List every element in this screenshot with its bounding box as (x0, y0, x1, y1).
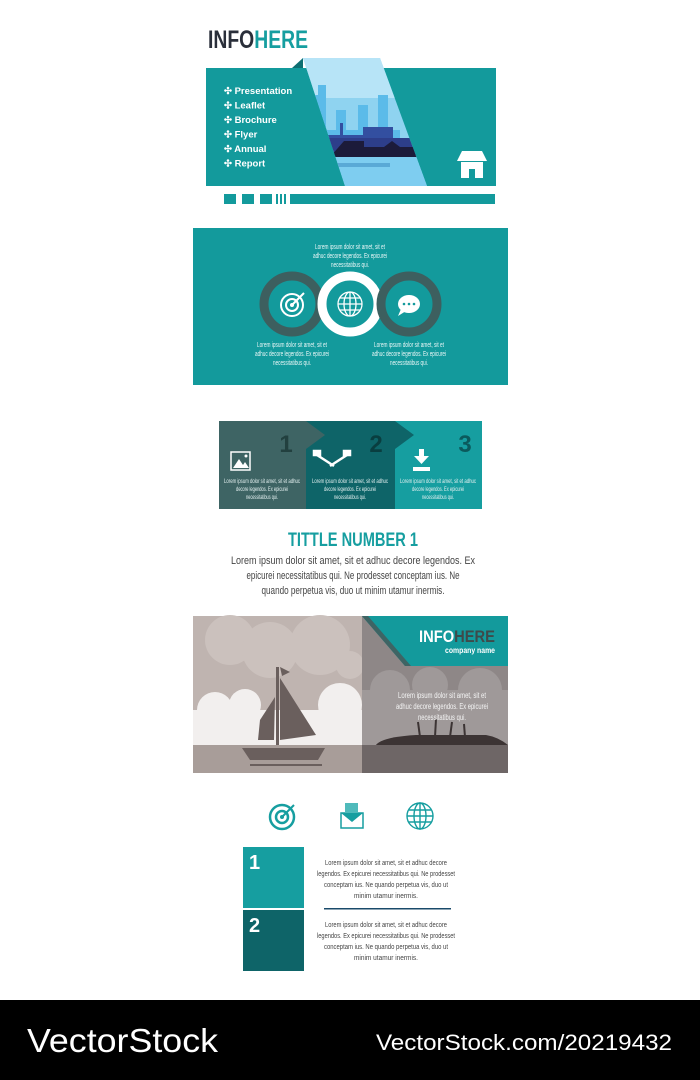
text: right: Lorem ipsum dolor sit amet, sit et (374, 342, 444, 349)
list: presentation items: ✣ Presentation (224, 86, 292, 97)
city image (300, 58, 430, 188)
item 2: legendos. Ex epicurei necessitatibus qui. Ne prodesset (317, 933, 455, 940)
step texts: decore legendos. Ex epicurei (324, 487, 376, 493)
panel: circles (193, 228, 508, 385)
text: right: necessitatibus qui. (390, 360, 428, 367)
step texts: necessitatibus qui. (246, 495, 278, 501)
item 1: legendos. Ex epicurei necessitatibus qui. Ne prodesset (317, 871, 455, 878)
text block: body: epicurei necessitatibus qui. Ne prodesset conceptam ius. Ne (246, 570, 460, 582)
step texts: necessitatibus qui. (334, 495, 366, 501)
text: top: Lorem ipsum dolor sit amet, sit et (315, 244, 385, 251)
heading: TITTLE NUMBER 1: TITTLE NUMBER 1 (288, 530, 418, 551)
step numbers: 1 (279, 431, 293, 458)
text: right: adhuc decore legendos. Ex epicurei (372, 351, 446, 358)
step texts: Lorem ipsum dolor sit amet, sit et adhuc (400, 479, 476, 485)
step numbers (279, 431, 472, 458)
item 1: minim utamur inermis. (354, 893, 418, 900)
text: left: Lorem ipsum dolor sit amet, sit et (257, 342, 327, 349)
icon row (270, 803, 433, 829)
circle: chat (381, 276, 437, 332)
text: top (313, 244, 387, 269)
progress bar (224, 194, 495, 204)
icon: handshake (314, 451, 350, 466)
step texts (224, 479, 476, 501)
item 1: 1 (249, 852, 260, 874)
photo text (396, 691, 488, 722)
text block: body: quando perpetua vis, duo ut minim utamur inermis. (262, 585, 444, 597)
item 2: Lorem ipsum dolor sit amet, sit et adhuc decore (325, 922, 447, 929)
icon: home (457, 151, 487, 178)
footer: VectorStock (27, 1022, 219, 1059)
item 1: Lorem ipsum dolor sit amet, sit et adhuc decore (325, 860, 447, 867)
photo text: necessitatibus qui. (418, 713, 466, 722)
text: left: necessitatibus qui. (273, 360, 311, 367)
panel: photo (193, 615, 508, 773)
step numbers: 2 (369, 431, 383, 458)
title: INFOHERE: INFOHERE (208, 26, 308, 54)
teal corner banner (362, 616, 508, 666)
list: presentation items: ✣ Brochure (224, 115, 277, 126)
text block: body (231, 555, 475, 597)
step texts: Lorem ipsum dolor sit amet, sit et adhuc (224, 479, 300, 485)
item 1: conceptam ius. Ne quando perpetua vis, duo ut (324, 882, 448, 889)
step texts: decore legendos. Ex epicurei (412, 487, 464, 493)
text: right (372, 342, 446, 367)
list: presentation items: ✣ Report (224, 158, 266, 170)
footer (0, 1000, 700, 1080)
step numbers: 3 (458, 431, 472, 458)
item 1 (243, 847, 455, 908)
icon: download (413, 449, 430, 471)
circle: target (264, 276, 320, 332)
icon: mail (341, 803, 363, 828)
item 2: 2 (249, 915, 260, 937)
list: presentation items: ✣ Annual (224, 144, 266, 155)
step texts: necessitatibus qui. (422, 495, 454, 501)
photo text: Lorem ipsum dolor sit amet, sit et (398, 691, 487, 700)
icon: picture (231, 452, 250, 470)
text: top: adhuc decore legendos. Ex epicurei (313, 253, 387, 260)
boat (242, 667, 325, 766)
text block: body: Lorem ipsum dolor sit amet, sit et adhuc decore legendos. Ex (231, 555, 475, 567)
numbered list (243, 847, 455, 971)
item 2: minim utamur inermis. (354, 955, 418, 962)
text: left (255, 342, 329, 367)
list: presentation items: ✣ Flyer (224, 130, 258, 140)
circle: globe (322, 276, 378, 332)
text: left: adhuc decore legendos. Ex epicurei (255, 351, 329, 358)
step texts: decore legendos. Ex epicurei (236, 487, 288, 493)
item 2: conceptam ius. Ne quando perpetua vis, duo ut (324, 944, 448, 951)
panel: header banner (206, 58, 496, 188)
island (376, 719, 508, 745)
teal corner banner: company name (445, 646, 495, 655)
icon: target (270, 805, 294, 829)
icon: globe (407, 803, 433, 829)
list: presentation items (224, 86, 292, 170)
panel: three steps (219, 421, 482, 509)
teal corner banner: INFOHERE (419, 627, 495, 646)
footer: VectorStock.com/20219432 (376, 1030, 672, 1055)
item 2 (243, 910, 455, 971)
list: presentation items: ✣ Leaflet (224, 100, 266, 112)
step texts: Lorem ipsum dolor sit amet, sit et adhuc (312, 479, 388, 485)
text: top: necessitatibus qui. (331, 262, 369, 269)
photo text: adhuc decore legendos. Ex epicurei (396, 702, 488, 711)
